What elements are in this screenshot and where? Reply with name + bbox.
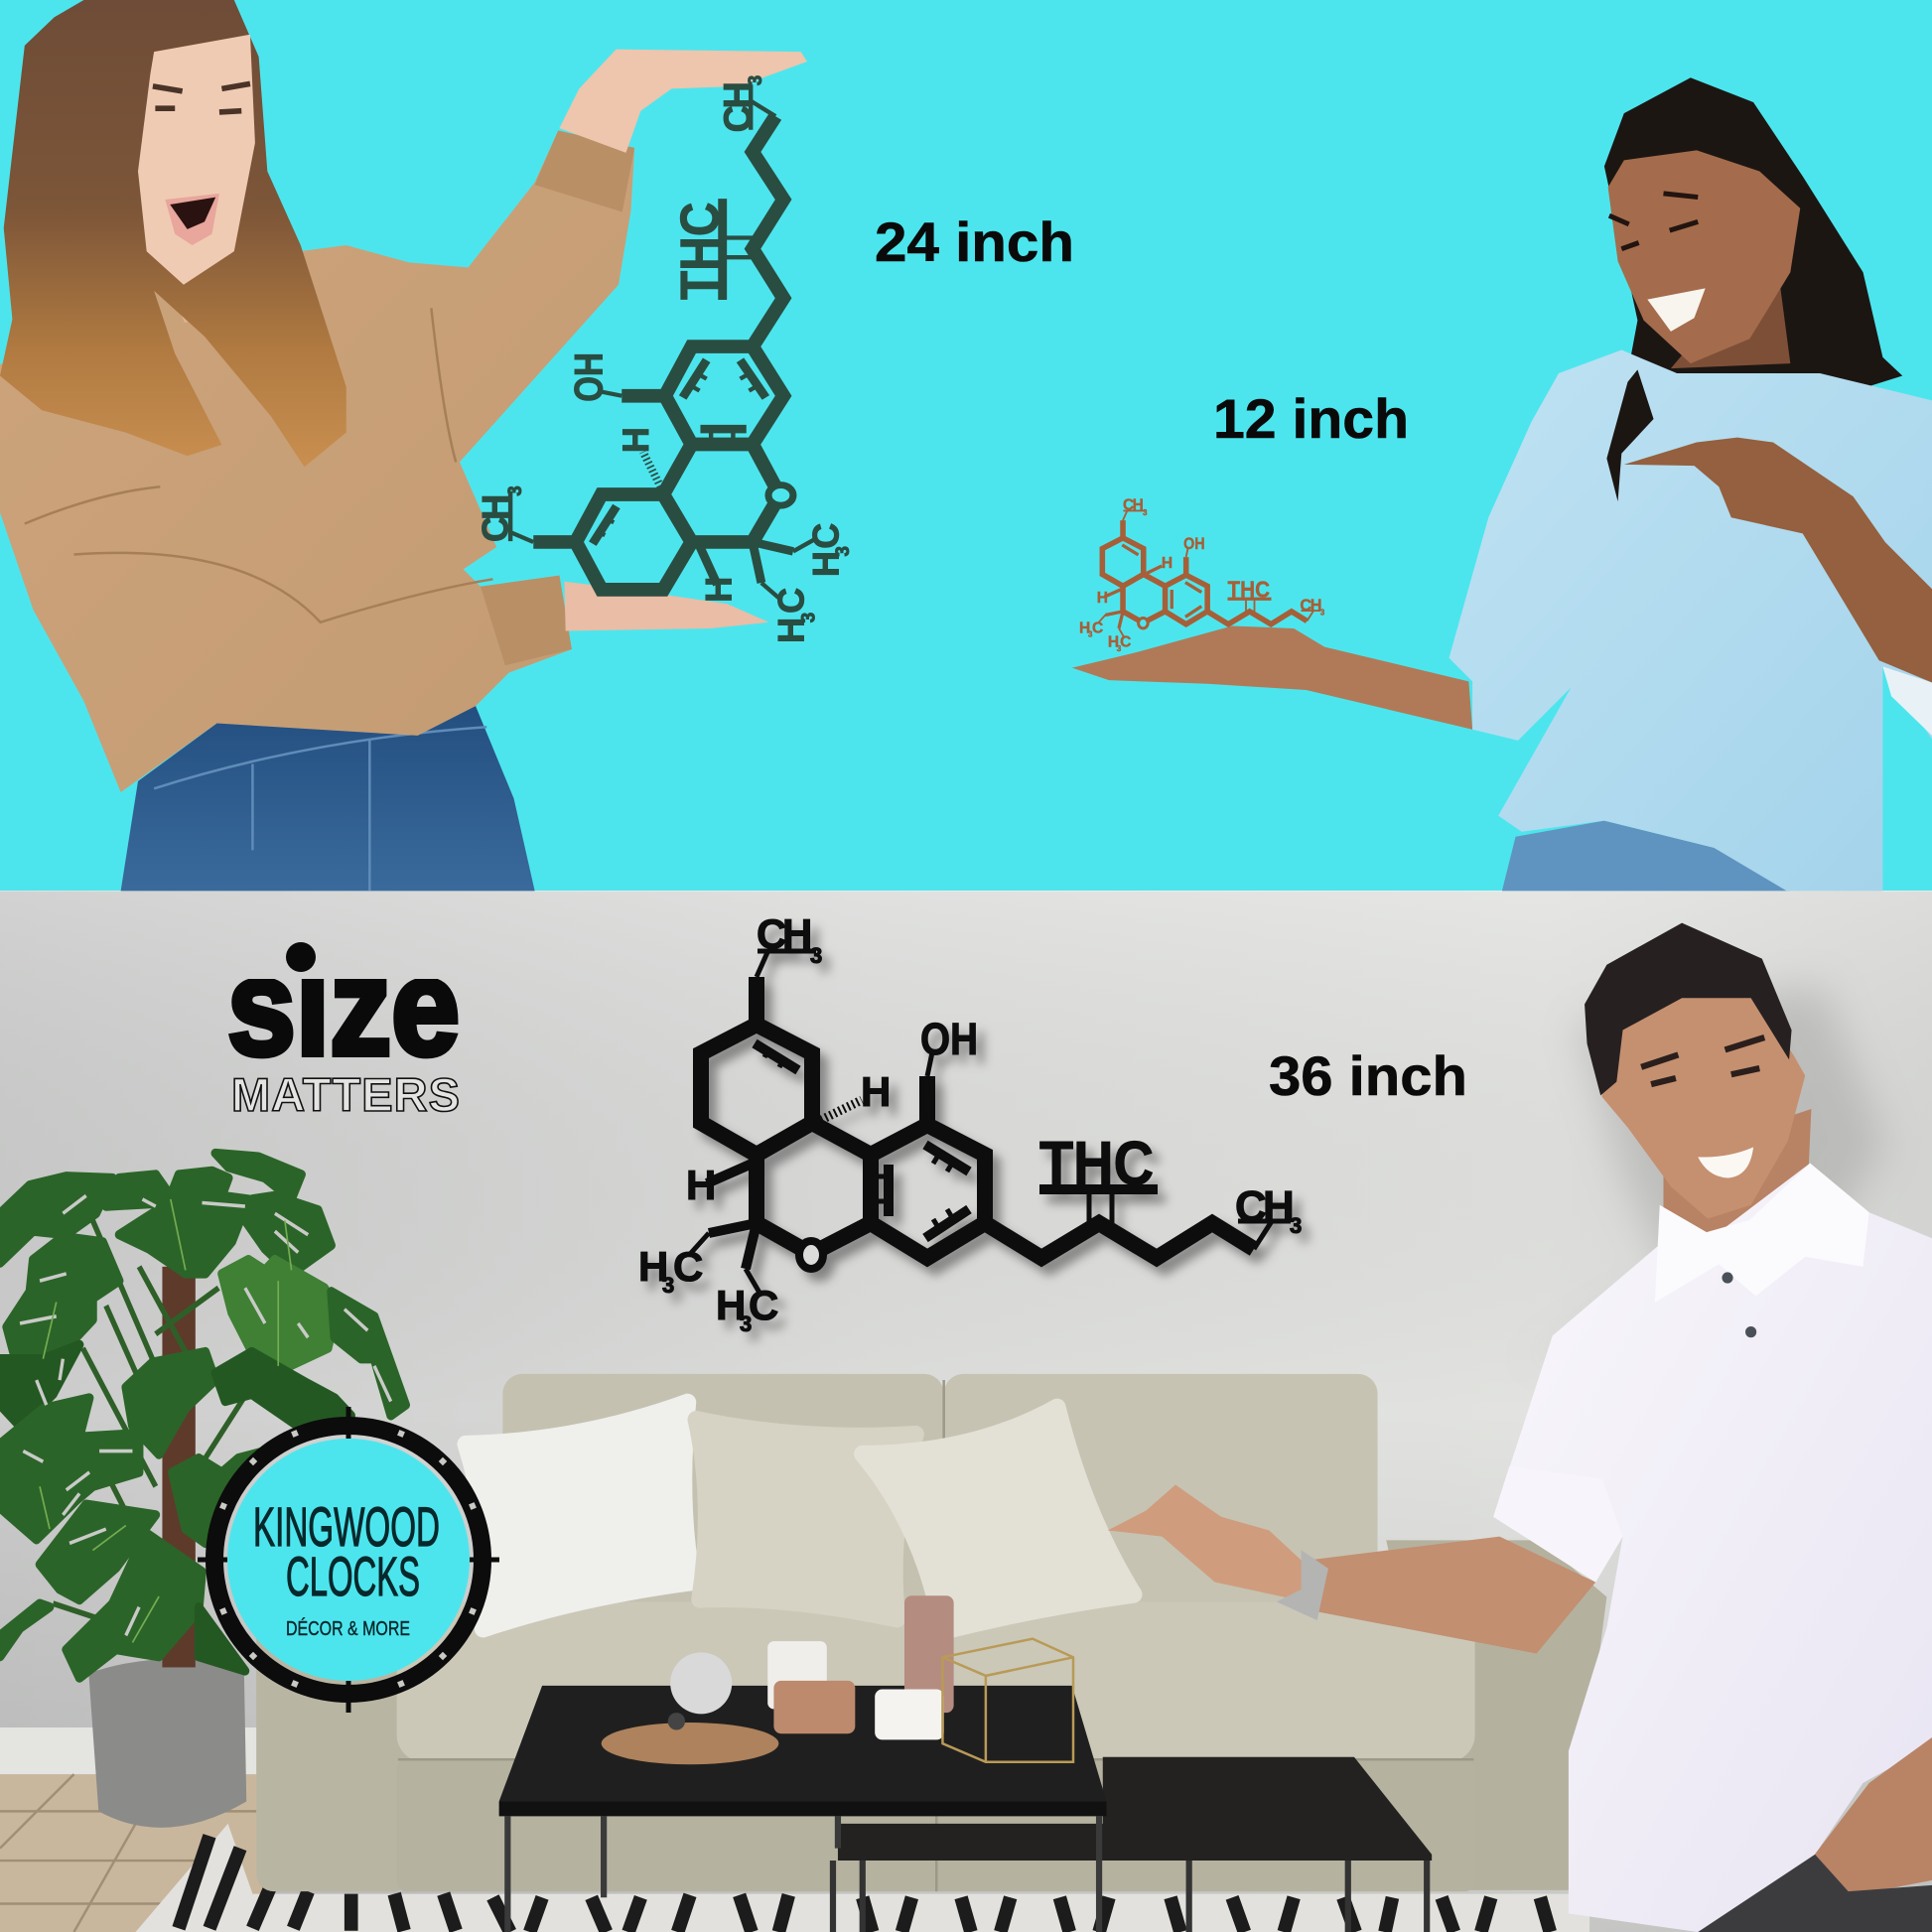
atom labels: H xyxy=(805,551,846,577)
trousers xyxy=(1698,1855,1932,1932)
atom labels: H xyxy=(716,1282,746,1328)
atom labels: OH xyxy=(920,1014,978,1064)
logo tagline: DÉCOR & MORE xyxy=(286,1617,410,1640)
atom labels xyxy=(638,910,1302,1336)
atom labels xyxy=(475,75,854,643)
atom labels: THC xyxy=(1227,576,1270,602)
table decor xyxy=(602,1595,1073,1764)
white cuff xyxy=(1882,666,1932,736)
sweater xyxy=(0,131,634,792)
hands xyxy=(559,50,807,630)
label: 12 inch: 12 inch xyxy=(1213,387,1409,450)
atom labels: C xyxy=(717,105,759,132)
hair xyxy=(0,0,346,467)
hair xyxy=(1604,77,1902,501)
eyes xyxy=(1609,194,1698,249)
leaf veins xyxy=(40,1199,292,1642)
sweater xyxy=(1449,349,1932,891)
atom labels: 3 xyxy=(740,1311,752,1336)
neck xyxy=(154,234,246,323)
baseboard and floor xyxy=(0,1727,265,1932)
rings and chain xyxy=(1102,520,1307,624)
atom labels: C xyxy=(757,910,786,957)
atom labels: C xyxy=(805,523,846,549)
rings and chain xyxy=(533,116,783,590)
man's wall shadow xyxy=(1516,986,1885,1368)
cyan disc xyxy=(227,1439,470,1681)
fine bonds xyxy=(509,84,814,598)
wall xyxy=(0,891,1932,1932)
atom labels: 3 xyxy=(810,943,822,968)
hashed bond xyxy=(821,1100,862,1120)
atom labels: 3 xyxy=(746,75,766,85)
pillows xyxy=(466,1402,1134,1631)
logo: KingWood Clocks badge xyxy=(198,1407,499,1713)
atom labels: 3 xyxy=(1320,609,1325,618)
atom labels: THC xyxy=(1039,1130,1154,1198)
watch xyxy=(1277,1550,1328,1620)
man xyxy=(1108,923,1932,1932)
atom labels: OH xyxy=(567,352,612,402)
logo second line: CLOCKS xyxy=(286,1545,420,1607)
double bonds and thin bonds xyxy=(1105,545,1272,628)
panel: living room scene xyxy=(0,891,1932,1932)
oxygen ring xyxy=(768,485,793,505)
smile xyxy=(1698,1147,1753,1177)
neck xyxy=(1663,1109,1811,1282)
oxygen ring xyxy=(799,1241,823,1269)
atom labels: H xyxy=(1311,597,1321,615)
atom labels: C xyxy=(1120,634,1131,651)
person: woman on the right xyxy=(1072,77,1932,891)
atom labels: 3 xyxy=(1117,644,1122,653)
double bonds and thin bonds xyxy=(707,1043,1158,1269)
atom labels: C xyxy=(475,516,516,542)
atom labels: H xyxy=(638,1243,668,1290)
jeans xyxy=(121,706,535,891)
hair xyxy=(1585,923,1792,1095)
sofa xyxy=(256,1374,1606,1891)
collar xyxy=(1655,1164,1869,1303)
atom labels: H xyxy=(1079,620,1090,636)
atom labels: C xyxy=(770,588,812,614)
face xyxy=(138,35,255,285)
atom labels: C xyxy=(673,1243,703,1290)
atom labels: H xyxy=(861,1068,891,1115)
oxygen ring xyxy=(1139,618,1148,628)
atom labels: C xyxy=(1123,496,1134,513)
coffee tables xyxy=(499,1686,1432,1932)
atom labels: H xyxy=(475,494,516,520)
neck xyxy=(1671,288,1790,368)
dot of the i xyxy=(286,942,316,972)
atom labels: H xyxy=(686,1162,716,1208)
face xyxy=(1608,150,1800,363)
atom labels: H xyxy=(770,618,812,643)
atom labels: OH xyxy=(1183,534,1205,553)
person: woman on the left xyxy=(0,0,807,891)
atom labels: H xyxy=(1108,634,1119,651)
hair strand over sweater xyxy=(1606,369,1654,501)
molecule: 36 inch, black on wall xyxy=(638,910,1302,1336)
atom labels: H xyxy=(782,910,812,957)
atom labels xyxy=(1079,496,1325,653)
fine bonds xyxy=(1099,510,1320,637)
atom labels: H xyxy=(615,427,656,453)
atom labels: C xyxy=(1092,620,1103,636)
extended arm and palm xyxy=(1072,625,1472,730)
atom labels: 3 xyxy=(1143,508,1148,517)
polo shirt xyxy=(1493,1164,1932,1932)
atom labels: C xyxy=(749,1282,778,1328)
pointing hand and arm xyxy=(1624,438,1932,683)
heading: size: size xyxy=(227,930,460,1084)
atom labels: H xyxy=(1162,555,1173,572)
arm xyxy=(1290,1537,1595,1654)
rings and chain xyxy=(701,977,1254,1258)
shirt buttons xyxy=(1727,1278,1751,1332)
atom labels: 3 xyxy=(1088,630,1093,639)
hand at hip xyxy=(1810,1737,1932,1900)
face xyxy=(1601,980,1805,1218)
atom labels: C xyxy=(1235,1182,1267,1231)
jeans xyxy=(1502,821,1790,891)
rug xyxy=(136,1824,1589,1932)
leaves xyxy=(0,1154,406,1678)
atom labels: 3 xyxy=(662,1273,674,1298)
logo wordmark: KINGWOOD xyxy=(253,1495,440,1558)
atom labels: 3 xyxy=(1290,1213,1302,1238)
open hand xyxy=(1108,1485,1307,1601)
hashed bond xyxy=(643,452,660,486)
subheading: matters: MATTERS xyxy=(231,1068,460,1121)
moss pole xyxy=(162,1267,196,1667)
open mouth xyxy=(165,194,219,245)
hashed bond xyxy=(1147,566,1162,573)
ring markers xyxy=(219,1430,477,1688)
atom labels: H xyxy=(717,81,759,108)
title: size matters xyxy=(228,942,459,1112)
atom labels: H xyxy=(1097,590,1108,607)
leaf splits xyxy=(20,1195,391,1635)
panel: cyan studio background xyxy=(0,0,1932,891)
atom labels: H xyxy=(698,577,740,603)
stems xyxy=(53,1220,248,1617)
plant pot xyxy=(88,1659,246,1828)
atom labels: C xyxy=(1300,597,1311,615)
atom labels: 3 xyxy=(833,546,854,556)
atom labels: H xyxy=(1133,496,1144,513)
atom labels: 3 xyxy=(504,485,526,496)
outer clock ring xyxy=(214,1426,483,1694)
tick marks xyxy=(198,1407,499,1713)
label: 24 inch: 24 inch xyxy=(875,210,1074,273)
double bonds and thin bonds xyxy=(593,199,793,585)
molecule: 24 inch, dark green xyxy=(475,75,854,643)
label: 36 inch: 36 inch xyxy=(1269,1044,1467,1107)
fine bonds xyxy=(691,950,1291,1293)
sleeve cuff xyxy=(1493,1466,1623,1583)
atom labels: H xyxy=(1263,1182,1295,1231)
eyes and brows xyxy=(153,83,250,112)
mouth xyxy=(1647,288,1706,332)
atom labels: 3 xyxy=(798,613,819,622)
eyes and brows xyxy=(1641,1037,1764,1084)
molecule: 12 inch, copper xyxy=(1079,496,1325,653)
plant xyxy=(0,1154,406,1678)
atom labels: THC xyxy=(669,203,731,300)
